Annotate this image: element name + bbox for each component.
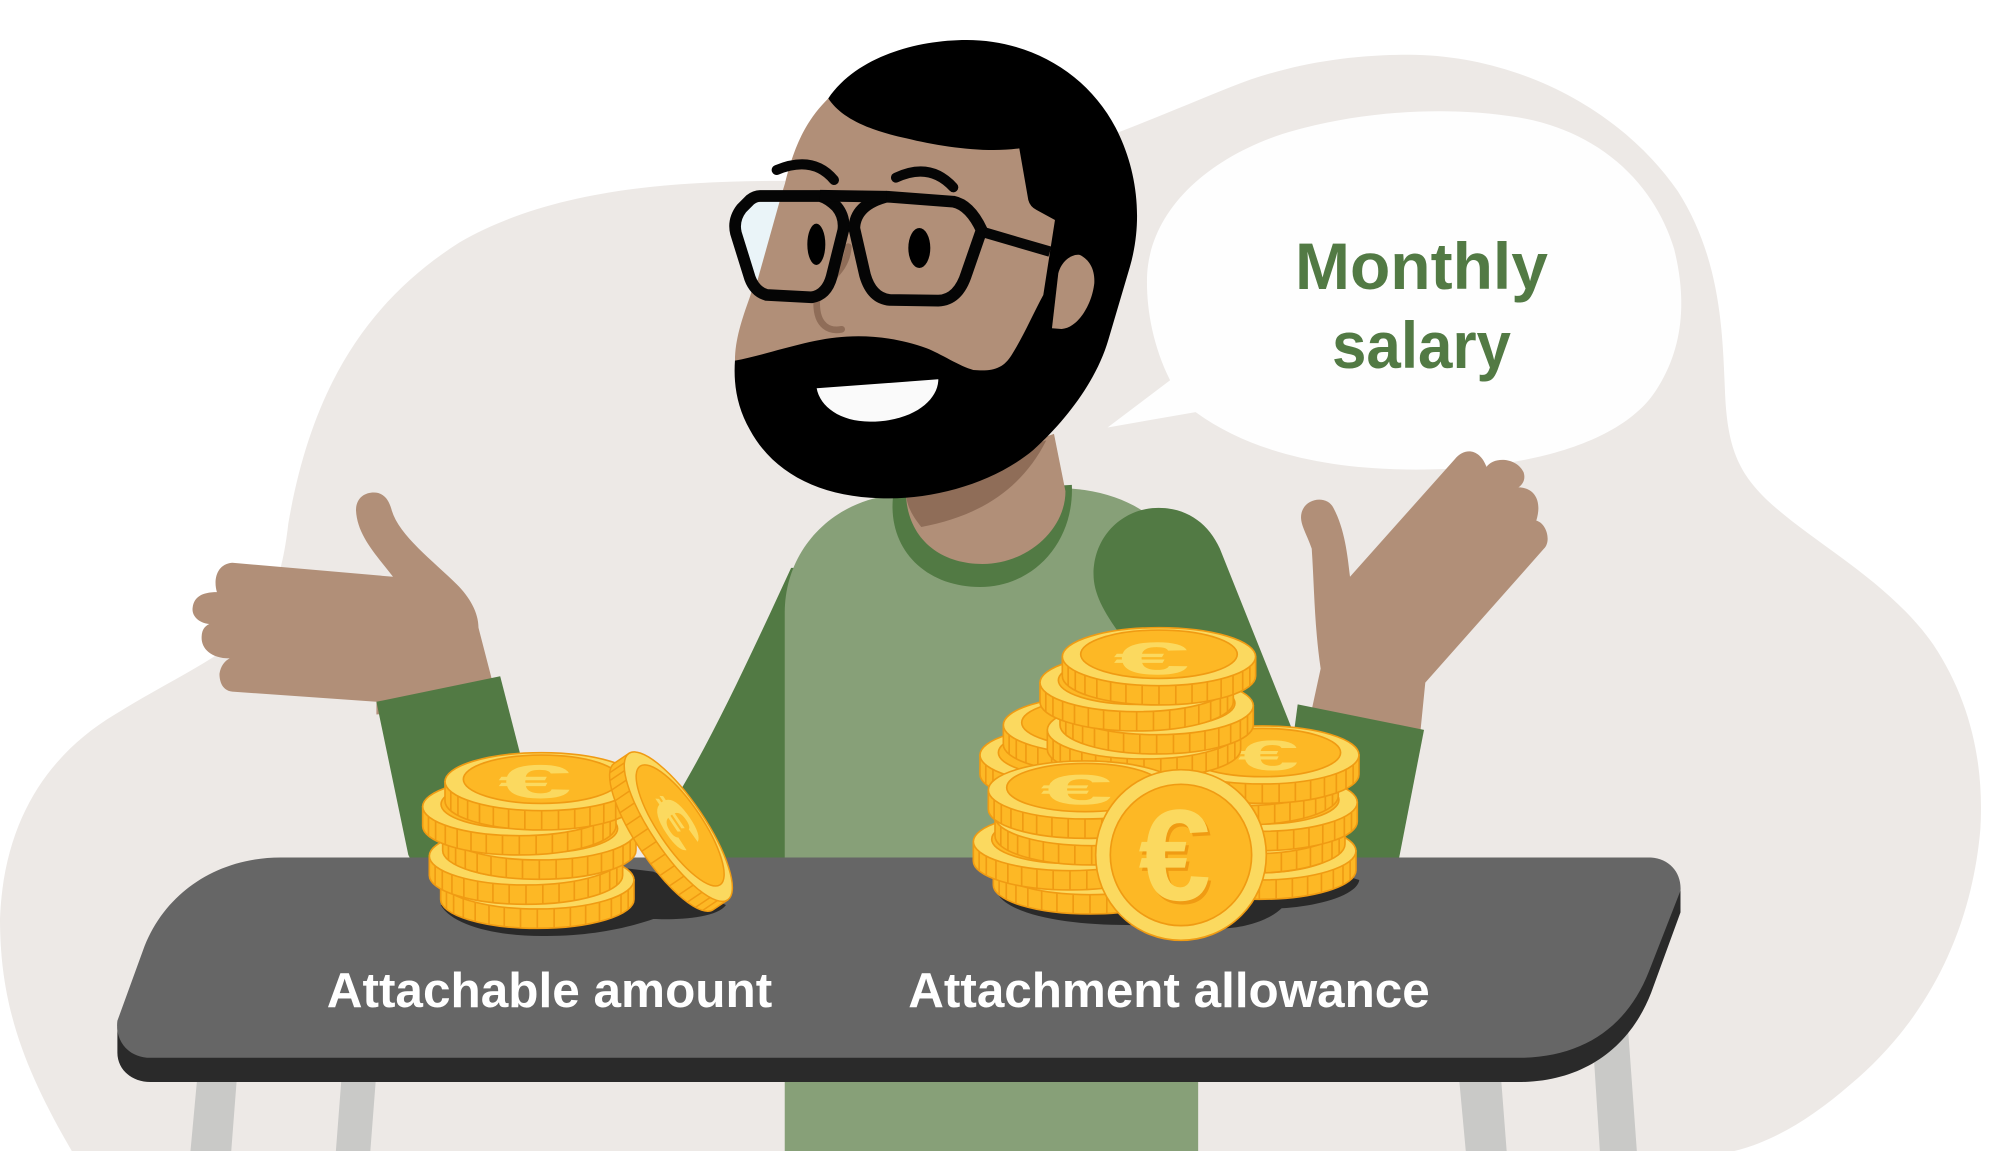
torso: [785, 486, 1198, 1151]
nose: [817, 247, 848, 330]
top stack: [1040, 628, 1256, 778]
neck shadow: [906, 440, 1046, 527]
right forearm: [1276, 704, 1424, 868]
lens glare: [735, 200, 780, 283]
hair and beard: [735, 40, 1137, 498]
character body and arms: [193, 434, 1548, 1151]
left front stack: €: [1041, 766, 1113, 814]
neck: [906, 434, 1065, 564]
right stack: €: [1238, 732, 1299, 779]
left sleeve: [664, 568, 804, 868]
speech bubble text: Monthly: [1295, 229, 1548, 303]
mouth: [817, 379, 938, 422]
label: attachable amount: Attachable amount: [327, 963, 772, 1018]
table shadow edge: [117, 887, 1680, 1082]
coin pile: attachment allowance: [973, 628, 1359, 940]
table: [117, 857, 1681, 1082]
front euro coin: €: [1141, 785, 1213, 931]
collar: [893, 485, 1072, 587]
table top: [117, 857, 1681, 1058]
eyebrows: [777, 164, 953, 187]
ear: [1052, 255, 1094, 329]
left forearm: [376, 676, 523, 880]
right hand: [1301, 451, 1548, 746]
head: [735, 40, 1137, 498]
speech bubble text second line: salary: [1332, 308, 1511, 382]
left eye: [807, 224, 825, 265]
label: attachment allowance: Attachment allowance: [908, 963, 1430, 1018]
left front stack: [973, 761, 1188, 914]
top stack: €: [1113, 633, 1190, 684]
coin shadow: [441, 868, 726, 936]
leaning coin: €: [640, 784, 712, 860]
front euro coin: €: [1138, 782, 1211, 928]
table legs: [190, 995, 1637, 1151]
coin stack: attachable amount: [423, 739, 750, 936]
pile shadow: [998, 870, 1359, 928]
right sleeve: [1094, 508, 1353, 868]
front euro coin: [1096, 770, 1266, 940]
back left stack: [980, 696, 1197, 803]
speech bubble: [1108, 111, 1681, 470]
leaning coin: [592, 739, 750, 925]
right eye: [908, 228, 930, 268]
left hand: [193, 493, 498, 715]
face: [735, 98, 1055, 370]
euro on top coin: €: [498, 756, 572, 808]
glasses: [735, 196, 1050, 301]
right stack: [1145, 726, 1359, 899]
